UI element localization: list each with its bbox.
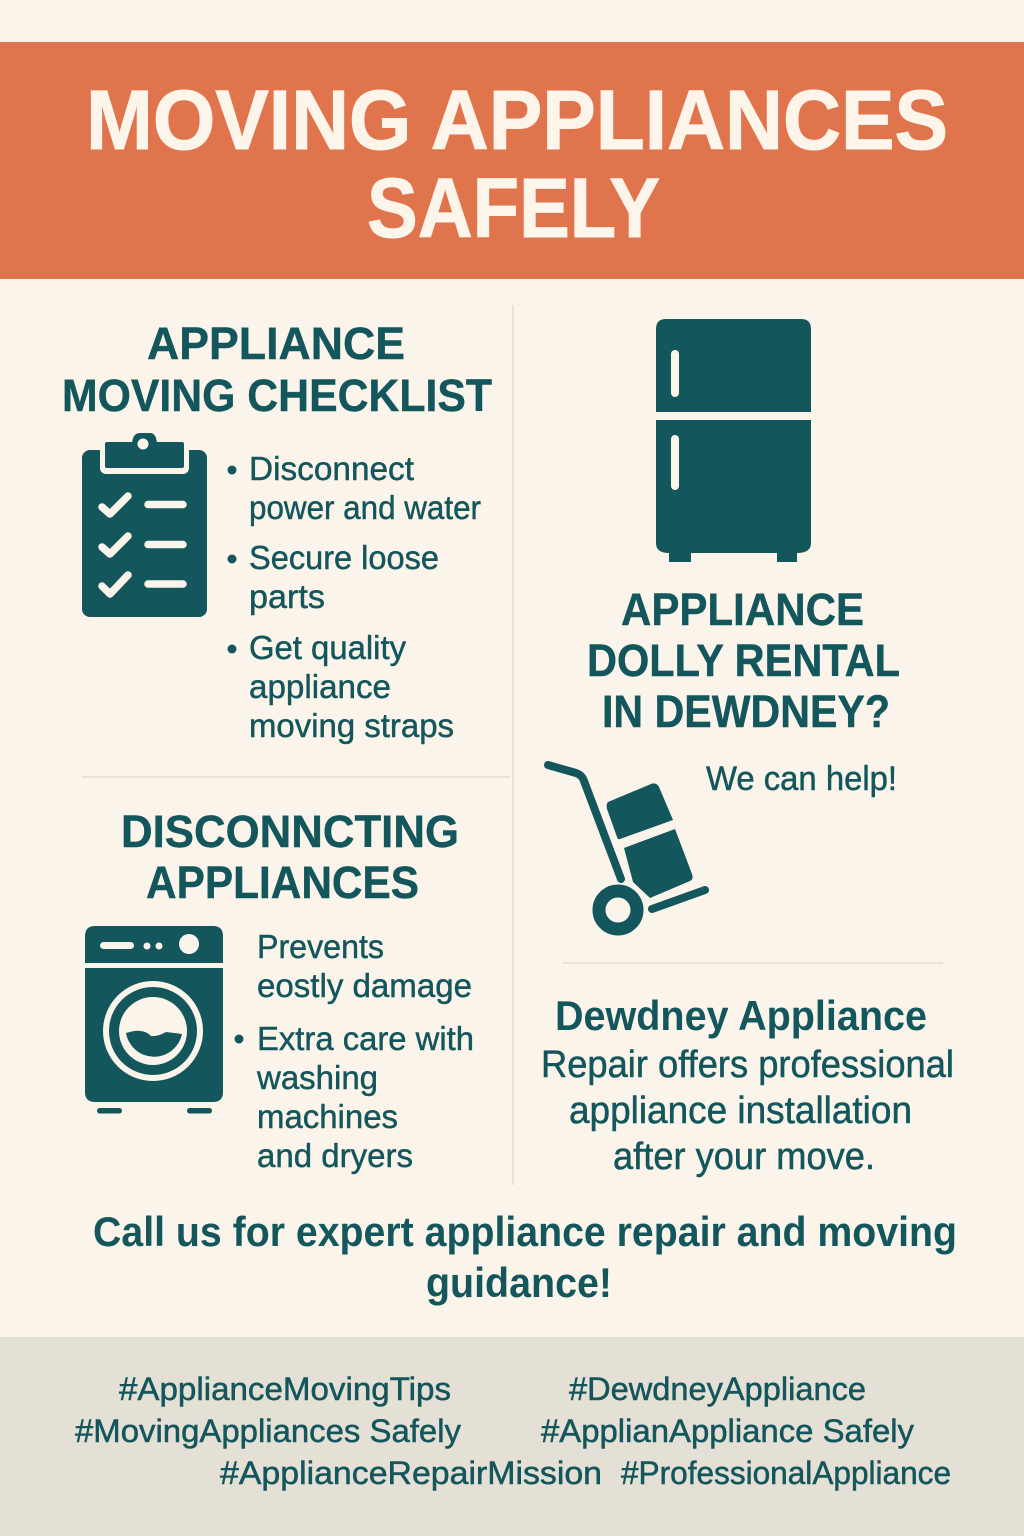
disconnecting bullets: Extra care with (257, 1020, 474, 1057)
checklist bullets: Get quality (249, 629, 406, 666)
icon: refrigerator (656, 319, 811, 562)
title banner: MOVING APPLIANCES (86, 73, 948, 167)
title banner (0, 42, 1024, 279)
disconnecting heading: DISCONNCTING (121, 806, 459, 857)
icon: clipboard checklist (82, 433, 207, 617)
panel: professional installation: after your move. (613, 1136, 875, 1178)
footer hashtags: #ApplianAppliance Safely (541, 1413, 914, 1449)
icon: washing machine (85, 926, 223, 1114)
panel: appliance moving checklist (62, 318, 492, 744)
disconnecting heading: APPLIANCES (146, 857, 419, 908)
disconnecting heading (121, 806, 459, 908)
panel: disconnecting appliances (85, 806, 474, 1174)
disconnecting bullets: Prevents (257, 928, 384, 965)
dolly heading: DOLLY RENTAL (587, 635, 900, 686)
checklist bullets: moving straps (249, 707, 454, 744)
footer hashtags: #MovingAppliances Safely (75, 1413, 461, 1449)
we can help text: We can help! (706, 760, 897, 798)
icon: hand truck with boxes (548, 765, 705, 929)
disconnecting bullets: eostly damage (257, 967, 472, 1004)
disconnecting bullets: machines (257, 1098, 398, 1135)
panel: professional installation: Repair offers professional (541, 1044, 954, 1086)
checklist heading (62, 318, 492, 421)
checklist bullets: power and water (249, 489, 481, 526)
disconnecting bullets: washing (256, 1059, 378, 1096)
panel: professional installation: appliance installation (569, 1090, 912, 1132)
dolly heading: APPLIANCE (621, 584, 864, 635)
disconnecting bullets: and dryers (257, 1137, 413, 1174)
disconnecting bullets (234, 928, 474, 1174)
footer hashtags: #ProfessionalAppliance (621, 1455, 951, 1491)
footer hashtags: #DewdneyAppliance (569, 1371, 866, 1407)
checklist bullets: appliance (249, 668, 391, 705)
title banner: SAFELY (367, 161, 660, 255)
checklist bullets: Disconnect (249, 450, 414, 487)
checklist bullets: Secure loose (249, 539, 439, 576)
panel: professional installation: Dewdney Appliance (555, 992, 927, 1039)
panel: professional installation (541, 992, 954, 1178)
checklist heading: APPLIANCE (147, 318, 405, 369)
footer hashtags (0, 1337, 1024, 1536)
call to action: guidance! (426, 1259, 612, 1306)
footer hashtags: #ApplianceRepairMission (220, 1455, 602, 1491)
dolly heading: IN DEWDNEY? (602, 686, 890, 737)
checklist bullets (228, 450, 481, 744)
call to action (93, 1208, 957, 1306)
dolly heading (587, 584, 900, 737)
checklist heading: MOVING CHECKLIST (62, 370, 492, 421)
panel: appliance dolly rental (548, 319, 900, 929)
footer hashtags: #ApplianceMovingTips (119, 1371, 451, 1407)
call to action: Call us for expert appliance repair and moving (93, 1208, 957, 1255)
checklist bullets: parts (249, 578, 325, 615)
